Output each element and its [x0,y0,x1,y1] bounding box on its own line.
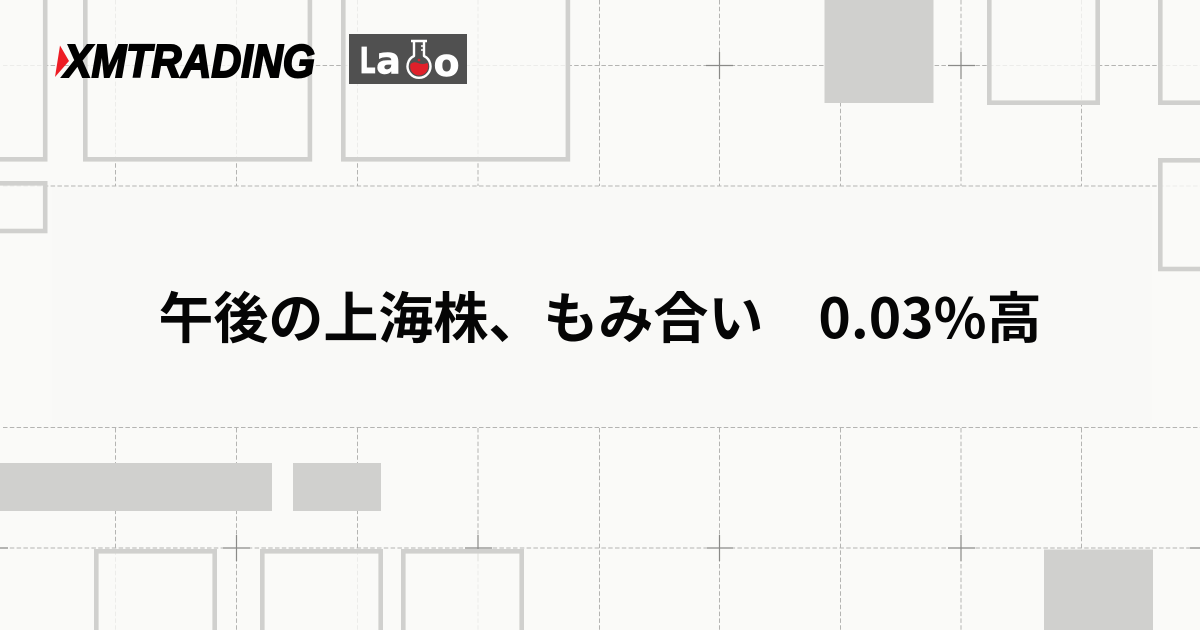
logo: Lab: o [434,41,460,84]
icon: flask [408,41,431,78]
logo: Lab [349,34,467,84]
title: 午後の上海株、もみ合い 0.03%高 [158,274,1042,354]
logo: Lab: L [360,41,376,82]
logo: Lab: a [376,40,401,82]
